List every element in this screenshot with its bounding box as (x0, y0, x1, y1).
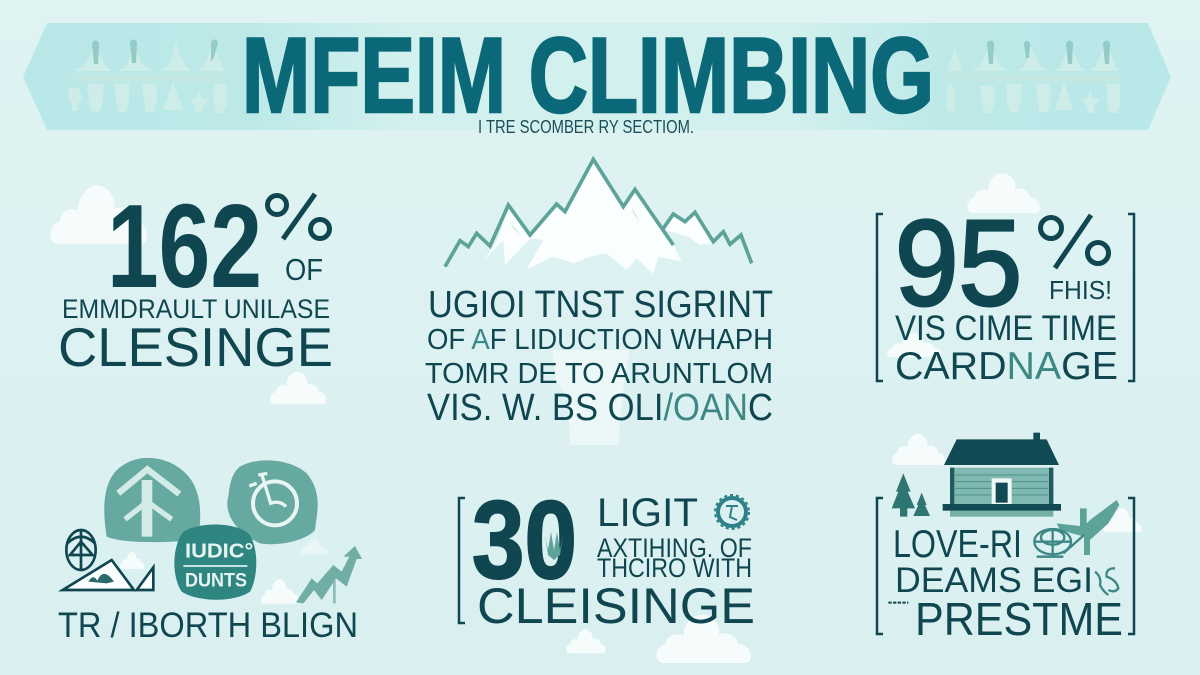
bracket (459, 498, 465, 623)
panel: stat 30: THCIRO WITH (597, 553, 752, 583)
panel: cabin (877, 433, 1134, 645)
panel: cabin: DEAMS EGI (895, 561, 1093, 600)
banner arrow shape (23, 23, 1171, 130)
panel: center mountain: TOMR DE TO ARUNTLOM (425, 358, 773, 390)
of label: OF (285, 252, 323, 287)
caption line: EMMDRAULT UNILASE (62, 294, 330, 324)
icon: gear (715, 495, 749, 529)
icon: trees (892, 473, 930, 517)
panel: icons cluster bottom left (58, 458, 362, 645)
text lines: LOVE-RI (893, 523, 1022, 566)
small label: FHIS! (1049, 275, 1112, 305)
icon: squiggle (1095, 568, 1118, 595)
subtitle: I TRE SCOMBER RY SECTIOM. (478, 117, 694, 137)
caption large: CLEISINGE (477, 578, 755, 634)
caption: TR / IBORTH BLIGN (58, 606, 358, 645)
silhouettes: right group (946, 41, 1120, 113)
icon: bike and plane (1034, 500, 1119, 557)
icon: small mountains (63, 560, 153, 590)
small dash marks (888, 600, 908, 606)
brackets (877, 498, 1134, 634)
squiggle inside zero (545, 532, 563, 560)
body text: AXTIHING. OF (597, 533, 752, 563)
panel: cabin: PRESTME (915, 593, 1123, 645)
icon: cabin house (943, 433, 1061, 517)
brackets (877, 214, 1134, 381)
percent sign (1040, 215, 1108, 268)
big number: 95 (895, 195, 1022, 331)
panel: stat 95 percent: CARDNAGE (895, 345, 1118, 388)
panel: stat 95 percent (877, 195, 1134, 388)
icon: arrow tree badge (104, 458, 200, 542)
big number: 162 (107, 180, 262, 313)
icon: mountain (445, 159, 752, 274)
icon: clock badge (227, 460, 318, 544)
faint climber figure (552, 350, 630, 445)
silhouettes: left group (68, 40, 227, 113)
panel: center mountain (425, 159, 773, 445)
icon: text badge: DUNTS (185, 571, 247, 592)
panel: stat 162 percent (58, 180, 333, 378)
icon: zigzag growth arrow (296, 546, 362, 603)
panel: center mountain: VIS. W. BS OLI/OANC (427, 387, 773, 429)
big number: 30 (472, 479, 577, 602)
panel: center mountain: OF AF LIDUCTION WHAPH (427, 324, 773, 356)
body text: UGIOI TNST SIGRINT (428, 284, 773, 326)
icon: text badge: IUDIC° (185, 539, 253, 562)
caption large: CLESINGE (58, 316, 333, 378)
panel: title banner (23, 15, 1171, 137)
panel: stat 30 (459, 479, 755, 634)
caption: VIS CIME TIME (895, 309, 1117, 348)
icon: climber helmet (66, 530, 96, 570)
percent sign (268, 194, 330, 239)
title: MFEIM CLIMBING (242, 15, 934, 135)
heading: LIGIT (597, 491, 698, 535)
icon: text badge (174, 525, 256, 600)
clouds (50, 173, 1142, 663)
